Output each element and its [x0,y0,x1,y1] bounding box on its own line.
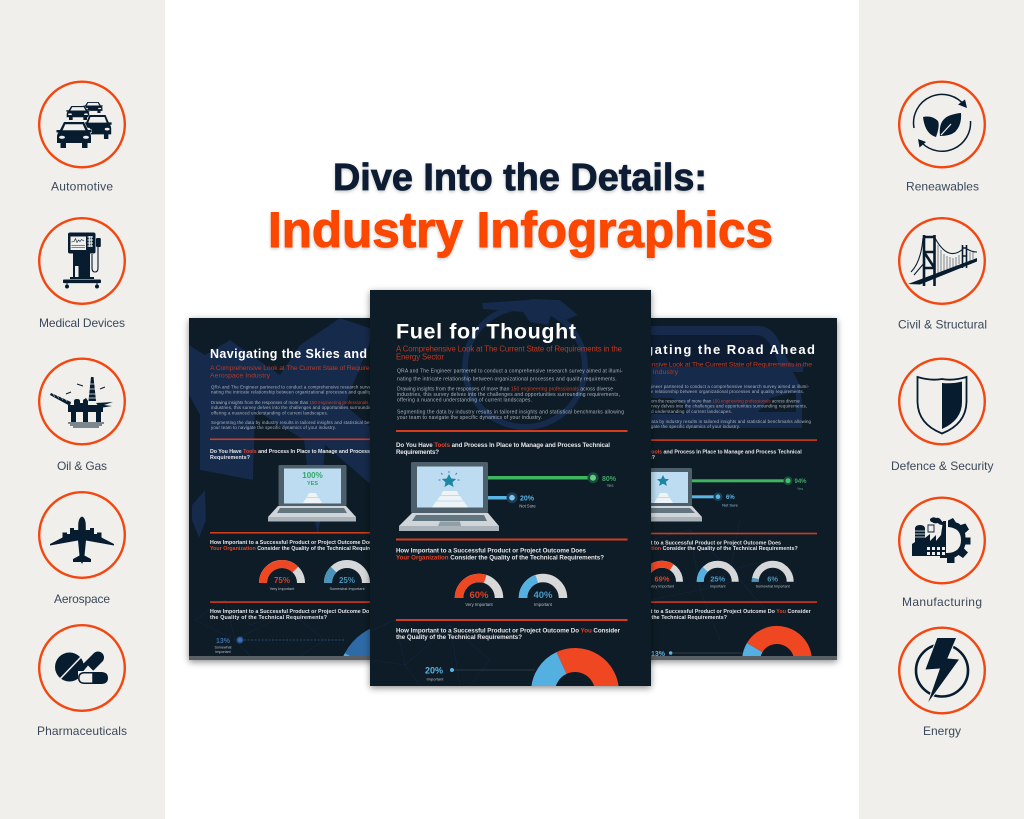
title line 2: Industry Infographics [268,202,773,258]
intro text: your team to navigate the specific dynamics of your industry. [615,424,740,429]
intro text: your team to navigate the specific dynamics of your industry. [397,415,542,421]
donut: 20% important: 20% [425,666,443,676]
laptop chart: 94% yes, 6% not sure: Not Sure [722,502,739,508]
infographic page: automotive (right) [651,315,842,667]
icon: leaves in cycle arrows [914,94,971,151]
donut: 13% somewhat important: Somewhat [215,646,231,650]
question 1: Requirements? [396,449,439,456]
laptop chart: 94% yes, 6% not sure: 94% [794,479,807,485]
laptop chart: 80% yes, 20% not sure: Not Sure [519,504,536,508]
subheading: Aerospace Industry [210,372,271,380]
watermark: airplane [189,318,370,534]
donut: 13% somewhat important: 13% [216,638,231,645]
gauge: 25% somewhat important [328,564,366,591]
icon: pills [55,652,110,686]
question 2: Your Organization Consider the Quality of the Technical Requirements? [396,554,604,562]
gauge: 6% somewhat important: Somewhat Important [756,584,790,588]
gauge: 75% very important [263,564,301,591]
laptop chart: 80% yes, 20% not sure: Yes [607,483,613,488]
label: medical devices: Medical Devices [39,316,125,330]
question 1: Requirements? [210,455,250,461]
industry: automotive [39,82,125,194]
question 3 [210,609,369,620]
laptop chart: 80% yes, 20% not sure: 80% [602,476,617,483]
industry: renewables [899,82,985,194]
gauge: 75% very important: 75% [274,576,290,585]
question 1 [396,442,610,456]
intro text: Drawing insights from the responses of more than 150 engineering professionals across diverse [615,398,801,404]
laptop chart: 94% yes, 6% not sure: Yes [797,486,803,491]
question 2 [396,547,604,562]
icon: cars [56,102,112,148]
heading: Navigating the Road Ahead [612,342,815,357]
gauge: 60% very important: 60% [469,590,489,601]
label: pharmaceuticals: Pharmaceuticals [37,724,127,738]
gauge: 60% very important: Very Important [465,602,493,607]
icon: airplane [50,516,114,564]
laptop: 100% yes: 100% [302,471,323,480]
gauge: 40% important: Important [534,602,553,607]
question 1: Do You Have Tools and Process In Place to Manage and Process Technical [615,450,802,456]
gauge: 6% somewhat important: 6% [767,574,778,584]
intro text: offering a nuanced understanding of current landscapes. [211,410,328,416]
label: aerospace: Aerospace [54,592,110,606]
gauge: 25% somewhat important: 25% [339,576,355,585]
question 2: How Important to a Successful Product or Project Outcome Does [210,540,375,546]
donut: 13%: 13% [651,651,666,658]
intro text: industries, this survey delves into the challenges and opportunities surrounding requirements, [397,392,620,398]
intro text: Segmenting the data by industry results in tailored insights and statistical benchmarks allowing [615,419,812,424]
intro text: industries, this survey delves into the challenges and opportunities surrounding requirements, [211,405,404,410]
infographic page: aerospace (left) [184,315,370,667]
subheading: A Comprehensive Look at The Current State of Requirements in the [615,362,812,369]
laptop chart: 94% yes, 6% not sure: 6% [726,495,735,501]
industry: energy [899,628,985,738]
intro text: industries, this survey delves into the challenges and opportunities surrounding requirements, [615,404,807,408]
icon: lightning bolt in ring [916,638,968,702]
question 2: How Important to a Successful Product or Project Outcome Does [615,540,781,546]
panel: right industries [859,0,1024,819]
intro text: offering a nuanced understanding of current landscapes. [397,397,532,403]
laptop: 100% yes: YES [307,481,318,487]
label: renewables: Reneawables [906,180,979,194]
intro text: QRA and The Engineer partnered to conduct a comprehensive research survey aimed at illumi- [397,369,623,375]
icon: factory and gear [912,517,970,563]
donut: 20% important: Important [427,676,444,682]
laptop chart: 80% yes, 20% not sure [399,462,617,531]
subheading: Automotive Industry [615,369,679,376]
gauge: 25% important [700,564,735,588]
icon: medical ventilator [63,232,101,288]
title line 1: Dive Into the Details: [333,157,707,199]
intro text: your team to navigate the specific dynamics of your industry. [211,425,336,430]
intro text: nating the intricate relationship between organizational processes and quality requirements. [615,389,804,394]
laptop: 100% yes [268,465,356,522]
icon: suspension bridge [908,235,977,286]
question 3: the Quality of the Technical Requirements? [396,634,522,641]
intro text: Drawing insights from the responses of more than 150 engineering professionals across diverse [397,386,613,392]
question 1: Do You Have Tools and Process In Place to Manage and Process Technical [210,449,396,455]
icon: shield [918,377,966,434]
question 2: Your Organization Consider the Quality of the Technical Requirements? [210,546,391,552]
label: automotive: Automotive [51,180,113,194]
subheading [210,366,370,379]
question 2 [210,540,370,551]
gauge: 60% very important [459,578,499,607]
gauge: 25% important: Important [710,584,725,588]
gauge: 25% important: 25% [710,574,726,584]
industry: pharmaceuticals [37,625,127,738]
gauge: 75% very important: Very Important [270,587,295,591]
question 3: the Quality of the Technical Requirements? [210,615,327,621]
watermark: fuel nozzle ring [465,299,585,427]
question 1: Do You Have Tools and Process In Place to Manage and Process Technical [396,442,610,449]
intro text: Segmenting the data by industry results in tailored insights and statistical benchmarks allowing [397,409,624,415]
intro text: offering a nuanced understanding of current landscapes. [615,409,732,414]
intro text: QRA and The Engineer partnered to conduct a comprehensive research survey aimed at illumi- [211,384,407,390]
gauge: 40% important [523,578,563,607]
subheading [651,362,812,376]
intro text: Drawing insights from the responses of more than 150 engineering professionals across diverse [211,400,399,405]
donut: 20% important [425,660,607,692]
donut: 13% [651,635,803,661]
subheading [396,344,622,362]
industry: medical devices [39,218,125,330]
intro text [651,384,811,429]
question 3 [396,627,621,641]
gauge: 6% somewhat important [755,564,790,588]
intro text: nating the intricate relationship between organizational processes and quality requirements. [211,390,401,395]
label: energy: Energy [923,724,961,738]
industry: manufacturing [899,498,985,609]
question 3: How Important to a Successful Product or Project Outcome Do You Consider [210,609,405,615]
question 3 [651,609,811,620]
question 1: Requirements? [615,455,655,461]
intro text: QRA and The Engineer partnered to conduct a comprehensive research survey aimed at illumi- [615,384,810,389]
question 2 [651,540,798,551]
industry: aerospace [39,492,125,606]
subheading: Energy Sector [396,353,444,362]
title [268,157,773,258]
label: oil and gas: Oil & Gas [57,459,107,473]
gauge: 40% important: 40% [533,590,553,601]
laptop chart: 80% yes, 20% not sure: 20% [520,496,535,502]
infographic page: energy (center) [370,290,651,692]
gauge: 69% very important [644,564,680,588]
laptop chart: 94% yes, 6% not sure [651,468,806,522]
question 3: How Important to a Successful Product or Project Outcome Do You Consider [615,609,811,615]
heading: Navigating the Skies and [210,347,367,361]
question 1 [651,450,802,459]
intro text [211,385,370,430]
subheading: A Comprehensive Look at The Current State of Requirements in the [396,344,622,354]
industry: oil and gas [39,359,125,473]
donut: 13% somewhat important: Important [215,650,231,654]
question 2: Your Organization Consider the Quality of the Technical Requirements? [615,546,798,552]
question 1 [210,449,370,460]
intro text: nating the intricate relationship between organizational processes and quality requirements. [397,377,617,383]
question 3: How Important to a Successful Product or Project Outcome Do You Consider [396,627,621,634]
intro text [397,369,624,421]
question 3: the Quality of the Technical Requirements? [615,615,727,621]
icon: star with rays [438,471,460,487]
label: manufacturing: Manufacturing [902,595,982,609]
label: defence and security: Defence & Security [891,459,994,473]
intro text: Segmenting the data by industry results in tailored insights and statistical benchmarks allowing [211,420,409,425]
industry: defence and security [891,359,994,473]
industry: civil and structural [898,218,987,332]
question 2: How Important to a Successful Product or Project Outcome Does [396,547,587,554]
heading: Fuel for Thought [396,320,576,344]
subheading: A Comprehensive Look at The Current State of Requirements in the [210,365,405,372]
gauge: 25% somewhat important: Somewhat Important [329,587,365,591]
label: civil and structural: Civil & Structural [898,318,987,332]
icon: offshore oil rig [50,377,113,427]
gauge: 69% very important: Very Important [650,584,674,588]
gauge: 69% very important: 69% [654,574,670,584]
donut: 13% somewhat important [214,628,370,656]
panel: left industries [0,0,165,819]
watermark: car [650,326,803,428]
